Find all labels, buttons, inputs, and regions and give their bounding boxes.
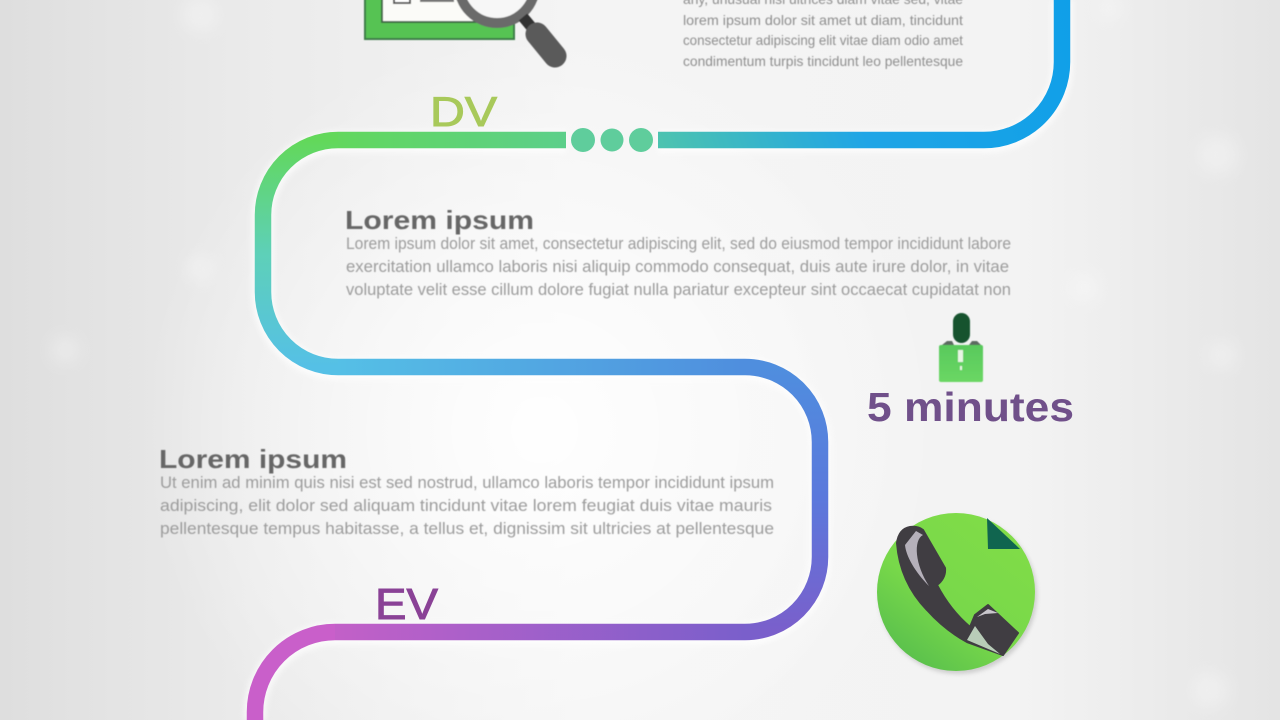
icon: phone badge	[877, 513, 1037, 674]
heading: DV: DV	[430, 88, 497, 135]
text block: top right body: condimentum turpis tincidunt leo pellentesque	[683, 53, 963, 69]
path dots	[571, 128, 653, 152]
body: upper paragraph: voluptate velit esse cillum dolore fugiat nulla pariatur excepteur sint occaecat cupidatat non	[346, 280, 1011, 299]
text block: lower lorem ipsum	[159, 444, 774, 538]
heading: upper lorem ipsum: Lorem ipsum	[345, 205, 534, 235]
icon: checklist under magnifying glass	[365, 0, 555, 56]
text block: upper lorem ipsum	[345, 205, 1011, 299]
label: 5 minutes: 5 minutes	[867, 384, 1074, 430]
body: lower paragraph	[160, 473, 774, 538]
body: upper paragraph	[346, 234, 1011, 299]
icon: magnifying glass	[459, 0, 555, 56]
text block: top right body: lorem ipsum dolor sit amet ut diam, tincidunt	[683, 12, 963, 28]
text block: top right body: consectetur adipiscing elit vitae diam odio amet	[683, 32, 963, 48]
body: lower paragraph: adipiscing, elit dolor sed aliquam tincidunt vitae lorem feugiat duis vitae mauris	[160, 496, 772, 515]
text block: top right body	[683, 0, 963, 69]
heading: EV: EV	[375, 580, 439, 629]
heading: lower lorem ipsum: Lorem ipsum	[159, 444, 347, 474]
body: upper paragraph: Lorem ipsum dolor sit amet, consectetur adipiscing elit, sed do eiusmod tempor incididunt labore	[346, 234, 1011, 253]
body: lower paragraph: Ut enim ad minim quis nisi est sed nostrud, ullamco laboris tempor incididunt ipsum	[160, 473, 774, 492]
icon: handset	[897, 527, 1018, 655]
roadmap path	[255, 0, 1062, 720]
body: upper paragraph: exercitation ullamco laboris nisi aliquip commodo consequat, duis aute irure dolor, in vitae	[346, 257, 1009, 276]
icon: padlock	[939, 313, 983, 382]
body: lower paragraph: pellentesque tempus habitasse, a tellus et, dignissim sit ultricies at pellentesque	[160, 519, 774, 538]
